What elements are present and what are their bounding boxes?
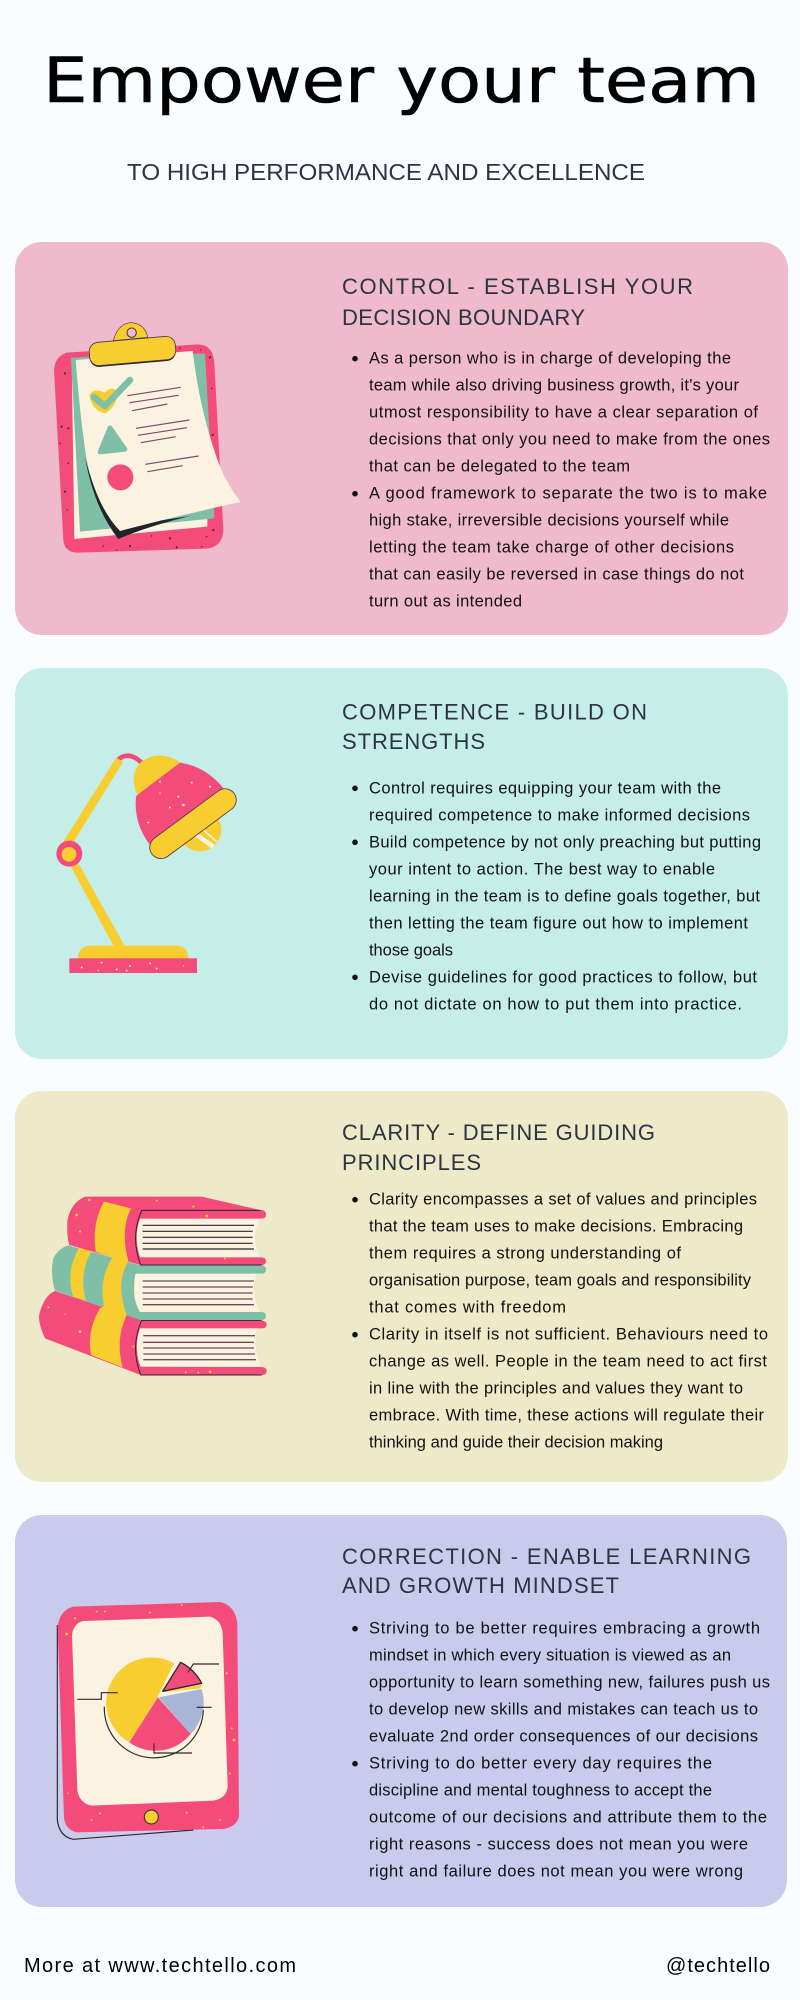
heading: control: CONTROL - ESTABLISH YOUR bbox=[342, 274, 693, 299]
bullets: control: decisions that only you need to make from the ones bbox=[369, 431, 770, 449]
bullets: clarity: organisation purpose, team goals and responsibility bbox=[369, 1272, 752, 1290]
bullets: control: letting the team take charge of other decisions bbox=[369, 539, 734, 557]
bullets: competence: your intent to action. The best way to enable bbox=[369, 860, 715, 878]
bullets: control: turn out as intended bbox=[369, 593, 522, 611]
heading: competence bbox=[342, 699, 647, 754]
panel: clarity bbox=[15, 1091, 788, 1482]
heading: competence: COMPETENCE - BUILD ON bbox=[342, 699, 647, 724]
bullets: correction: outcome of our decisions and attribute them to the bbox=[369, 1809, 767, 1827]
bullets: control: team while also driving business growth, it's your bbox=[369, 377, 740, 395]
bullets: correction: evaluate 2nd order consequences of our decisions bbox=[369, 1728, 758, 1746]
panel: control bbox=[15, 242, 788, 635]
bullets: correction: discipline and mental toughness to accept the bbox=[369, 1782, 712, 1800]
bullets: clarity: embrace. With time, these actions will regulate their bbox=[369, 1407, 764, 1425]
bullets: clarity: that comes with freedom bbox=[369, 1299, 566, 1317]
bullets: competence: required competence to make informed decisions bbox=[369, 806, 750, 824]
bullets: competence: Control requires equipping your team with the bbox=[369, 779, 721, 797]
heading: correction: AND GROWTH MINDSET bbox=[342, 1573, 619, 1598]
icon: stack of books bbox=[39, 1197, 267, 1375]
bullets: competence: those goals bbox=[369, 941, 453, 959]
heading: control: DECISION BOUNDARY bbox=[342, 305, 585, 330]
bullets: correction: right reasons - success does not mean you were bbox=[369, 1836, 748, 1854]
bullets: competence: learning in the team is to define goals together, but bbox=[369, 887, 760, 905]
icon: clipboard bbox=[54, 323, 241, 553]
bullets: correction: Striving to be better requires embracing a growth bbox=[369, 1620, 760, 1638]
bullets: clarity: in line with the principles and values they want to bbox=[369, 1380, 743, 1398]
panel: competence bbox=[15, 668, 788, 1059]
bullets: control: that can be delegated to the team bbox=[369, 458, 630, 476]
heading: clarity: PRINCIPLES bbox=[342, 1150, 481, 1175]
subtitle: TO HIGH PERFORMANCE AND EXCELLENCE bbox=[127, 159, 645, 185]
panel: correction bbox=[15, 1515, 787, 1907]
bullets: control: high stake, irreversible decisions yourself while bbox=[369, 512, 729, 530]
title: Empower your team bbox=[43, 44, 760, 117]
heading: competence: STRENGTHS bbox=[342, 729, 485, 754]
bullets: clarity: change as well. People in the team need to act first bbox=[369, 1353, 767, 1371]
bullets: clarity: Clarity in itself is not sufficient. Behaviours need to bbox=[369, 1326, 768, 1344]
bullets: control: that can easily be reversed in case things do not bbox=[369, 566, 744, 584]
bullets: control: A good framework to separate the two is to make bbox=[369, 485, 767, 503]
footer: handle: @techtello bbox=[666, 1955, 770, 1977]
bullets: clarity: Clarity encompasses a set of values and principles bbox=[369, 1191, 757, 1209]
bullets: competence: Devise guidelines for good practices to follow, but bbox=[369, 968, 757, 986]
bullets: competence bbox=[352, 779, 761, 1013]
bullets: correction: right and failure does not mean you were wrong bbox=[369, 1863, 743, 1881]
bullets: correction: Striving to do better every day requires the bbox=[369, 1755, 712, 1773]
bullets: correction: mindset in which every situation is viewed as an bbox=[369, 1647, 731, 1665]
bullets: clarity bbox=[352, 1191, 768, 1452]
bullets: clarity: that the team uses to make decisions. Embracing bbox=[369, 1218, 743, 1236]
bullets: control: utmost responsibility to have a clear separation of bbox=[369, 404, 758, 422]
bullets: competence: then letting the team figure out how to implement bbox=[369, 914, 748, 932]
bullets: correction: to develop new skills and mistakes can teach us to bbox=[369, 1701, 758, 1719]
icon: tablet with pie chart bbox=[57, 1602, 239, 1839]
footer: website: More at www.techtello.com bbox=[24, 1955, 296, 1977]
heading: correction bbox=[342, 1544, 751, 1598]
bullets: competence: Build competence by not only preaching but putting bbox=[369, 833, 761, 851]
bullets: correction bbox=[352, 1620, 770, 1881]
bullets: control: As a person who is in charge of developing the bbox=[369, 350, 731, 368]
icon: desk lamp bbox=[56, 755, 225, 973]
bullets: correction: opportunity to learn something new, failures push us bbox=[369, 1674, 770, 1692]
heading: clarity bbox=[342, 1120, 655, 1175]
heading: clarity: CLARITY - DEFINE GUIDING bbox=[342, 1120, 655, 1145]
bullets: competence: do not dictate on how to put them into practice. bbox=[369, 995, 742, 1013]
bullets: control bbox=[352, 350, 770, 611]
heading: correction: CORRECTION - ENABLE LEARNING bbox=[342, 1544, 751, 1569]
bullets: clarity: thinking and guide their decision making bbox=[369, 1434, 663, 1452]
bullets: clarity: them requires a strong understanding of bbox=[369, 1245, 681, 1263]
heading: control bbox=[342, 274, 693, 330]
